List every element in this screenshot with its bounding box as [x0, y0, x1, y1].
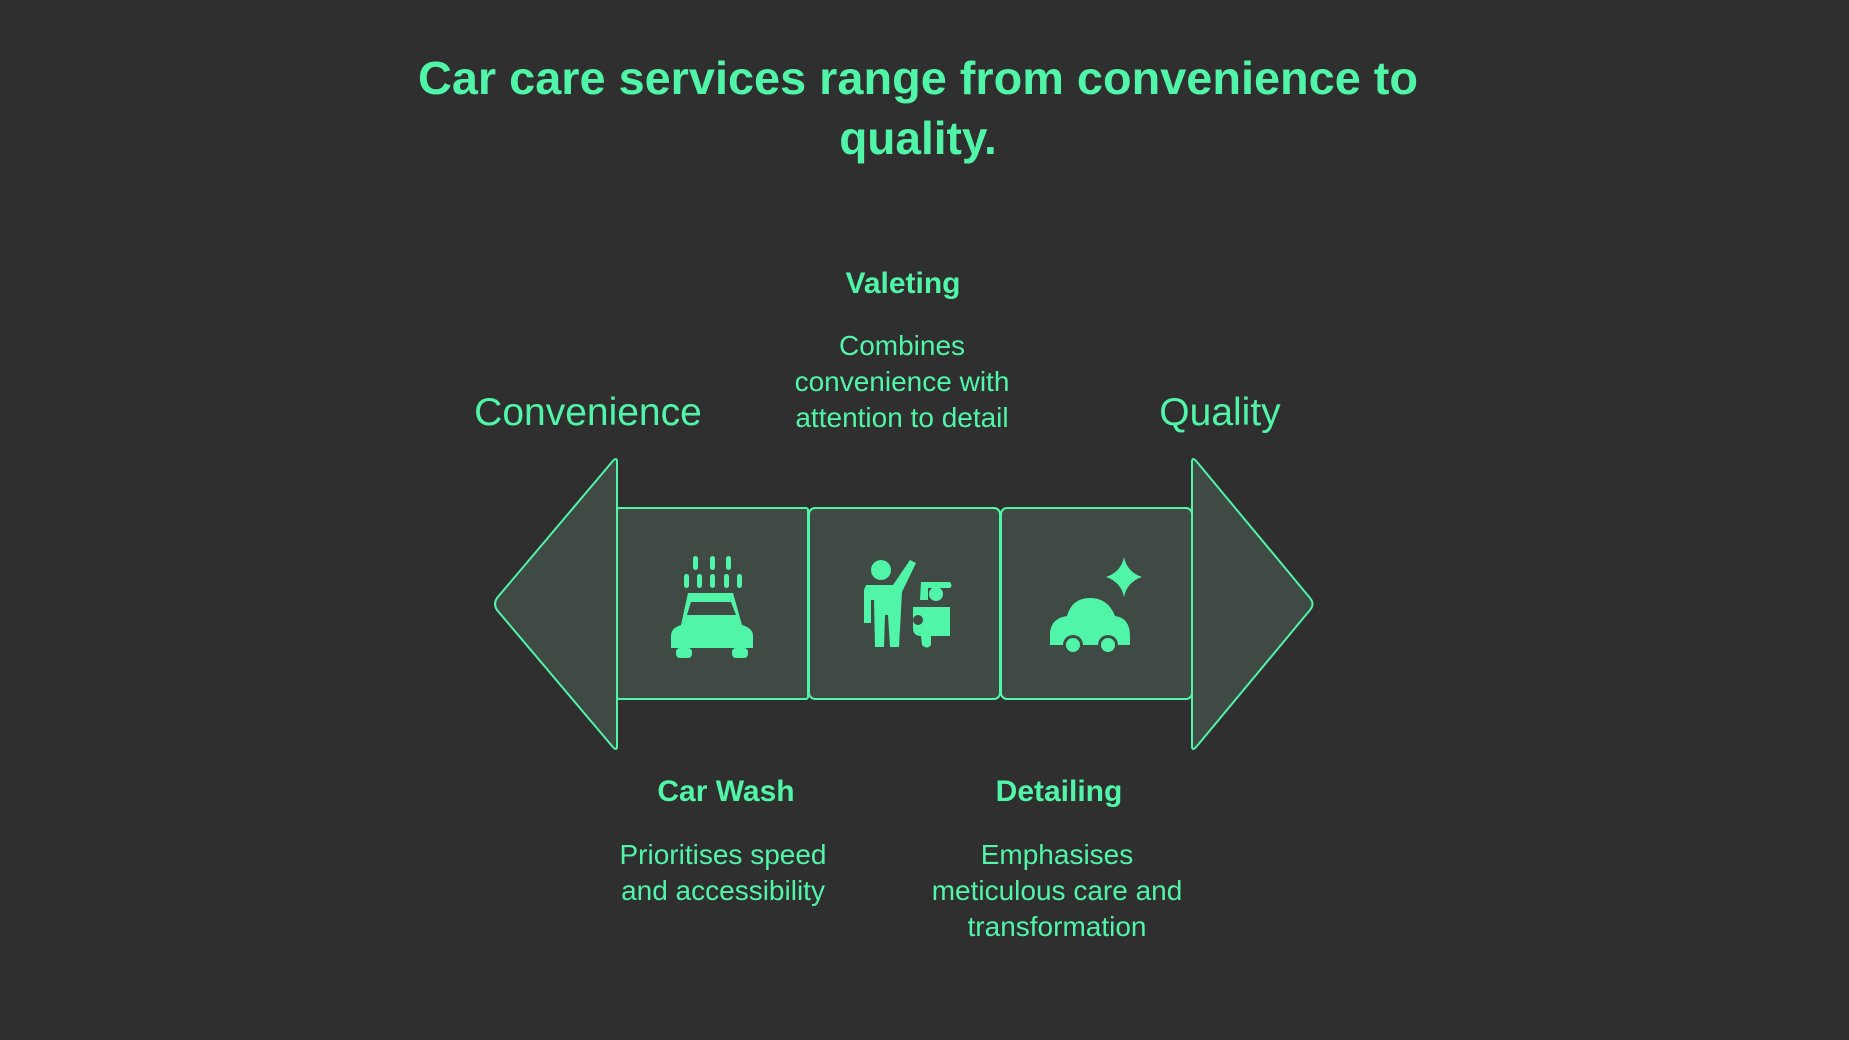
text block: detailing: transformation [968, 911, 1146, 942]
text block: detailing: Emphasises [981, 839, 1133, 870]
arrow: left (convenience) [495, 459, 617, 749]
text block: car wash [620, 775, 826, 906]
text block: valeting [795, 267, 1009, 433]
text block: detailing: Detailing [996, 775, 1122, 808]
title: Car care services range from convenience to [418, 52, 1418, 104]
text block: car wash: Car Wash [657, 775, 795, 808]
text block: valeting: Valeting [845, 267, 961, 300]
text block: car wash: and accessibility [621, 875, 825, 906]
text block: valeting: convenience with [795, 366, 1009, 397]
arrow: right (quality) [1192, 459, 1312, 749]
label: quality: Quality [1159, 391, 1281, 434]
label: convenience: Convenience [474, 391, 702, 434]
icon: car wash [671, 556, 753, 658]
text block: valeting: Combines [839, 330, 965, 361]
title [418, 52, 1418, 164]
box: valeting [809, 508, 1000, 699]
box: detailing [1001, 508, 1192, 699]
text block: detailing: meticulous care and [932, 875, 1182, 906]
icon: valet [864, 560, 952, 648]
text block: valeting: attention to detail [795, 402, 1009, 433]
title: quality. [839, 112, 997, 164]
text block: car wash: Prioritises speed [620, 839, 826, 870]
box: car wash [617, 508, 808, 699]
icon: sparkle car [1050, 557, 1142, 655]
text block: detailing [932, 775, 1182, 942]
